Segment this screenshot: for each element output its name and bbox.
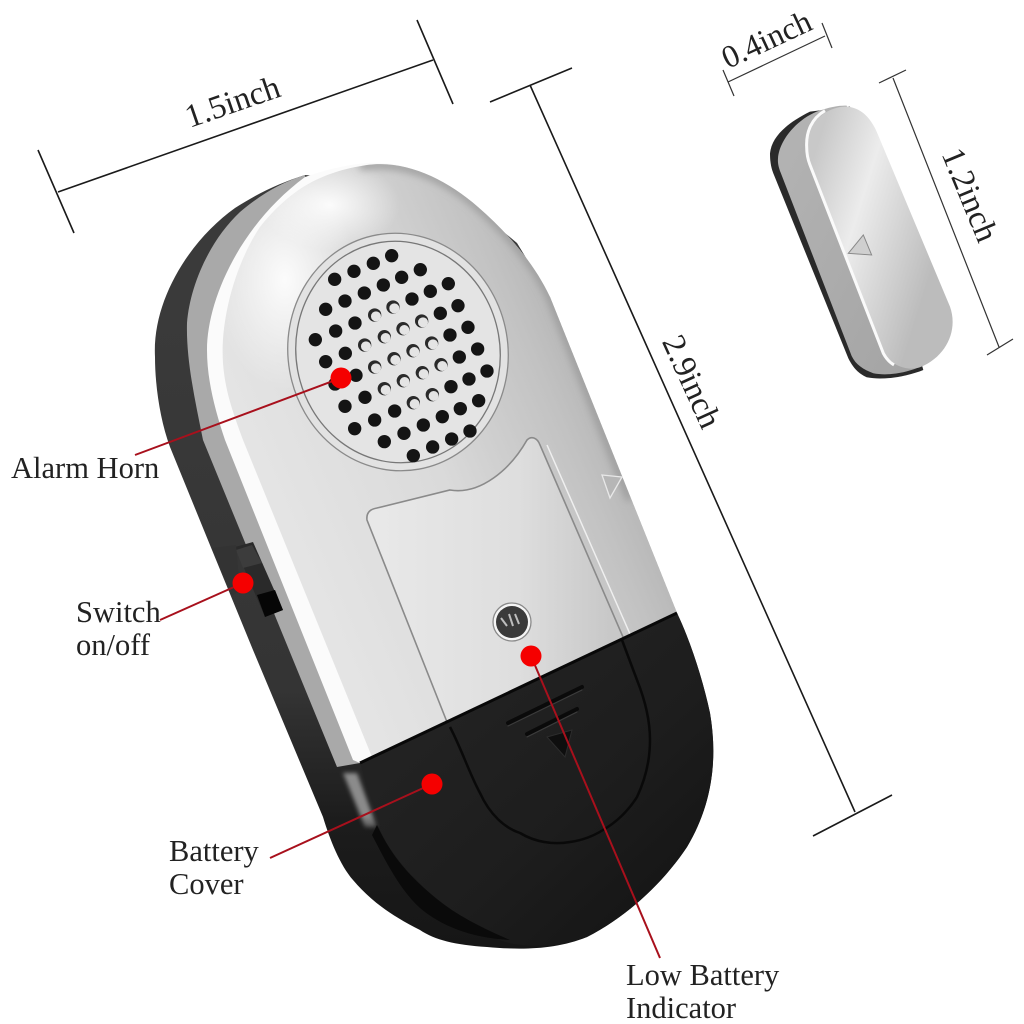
dimension: 0.4 inch xyxy=(716,3,832,96)
callout: low battery indicator xyxy=(520,646,780,1024)
callout: low battery indicator: Indicator xyxy=(626,991,736,1024)
callout: switch on/off: Switch xyxy=(76,595,161,629)
dimension: 2.9 inch xyxy=(490,68,892,836)
speaker holes: light centre xyxy=(361,303,447,409)
silver front face xyxy=(215,160,677,757)
cover outline xyxy=(450,640,650,843)
device body silhouette xyxy=(155,175,713,949)
silver side band xyxy=(187,175,360,767)
side facet gloss xyxy=(343,773,377,827)
dimension: 1.2 inch xyxy=(879,70,1013,355)
speaker holes: dark xyxy=(309,249,494,462)
main alarm device xyxy=(155,160,713,949)
callout: battery cover: Cover xyxy=(169,867,244,901)
cover arrow xyxy=(547,730,572,757)
callout: battery cover: Battery xyxy=(169,834,260,868)
sensor side xyxy=(778,106,917,374)
dimension: 0.4 inch: 0.4inch xyxy=(716,3,817,75)
callout: alarm horn xyxy=(11,368,352,485)
sensor dark base xyxy=(770,107,923,379)
black battery cover xyxy=(343,613,713,946)
callout: switch on/off xyxy=(76,572,254,662)
dimension: 1.2 inch: 1.2inch xyxy=(934,143,1005,248)
dimension: 1.5 inch xyxy=(38,20,453,233)
speaker holes: light centre rim xyxy=(358,300,448,409)
callout: low battery indicator: Low Battery xyxy=(626,958,780,992)
cover grip slots xyxy=(508,687,582,734)
sensor arrow xyxy=(848,235,872,255)
sensor face white rim xyxy=(807,111,894,365)
sensor face xyxy=(807,107,953,369)
door sensor xyxy=(770,106,953,379)
dimension: 1.5 inch: 1.5inch xyxy=(181,69,285,136)
white edge highlight xyxy=(207,163,677,763)
low battery LED xyxy=(493,603,531,641)
callout: alarm horn: Alarm Horn xyxy=(11,451,159,485)
dark strip beside cover xyxy=(372,825,510,940)
triangle arrow mark xyxy=(602,475,622,498)
power switch xyxy=(212,542,283,617)
callout: switch on/off: on/off xyxy=(76,628,151,662)
callout: battery cover xyxy=(169,774,442,901)
speaker grille xyxy=(269,216,527,488)
battery compartment door xyxy=(367,438,630,722)
dimension: 2.9 inch: 2.9inch xyxy=(654,330,728,434)
